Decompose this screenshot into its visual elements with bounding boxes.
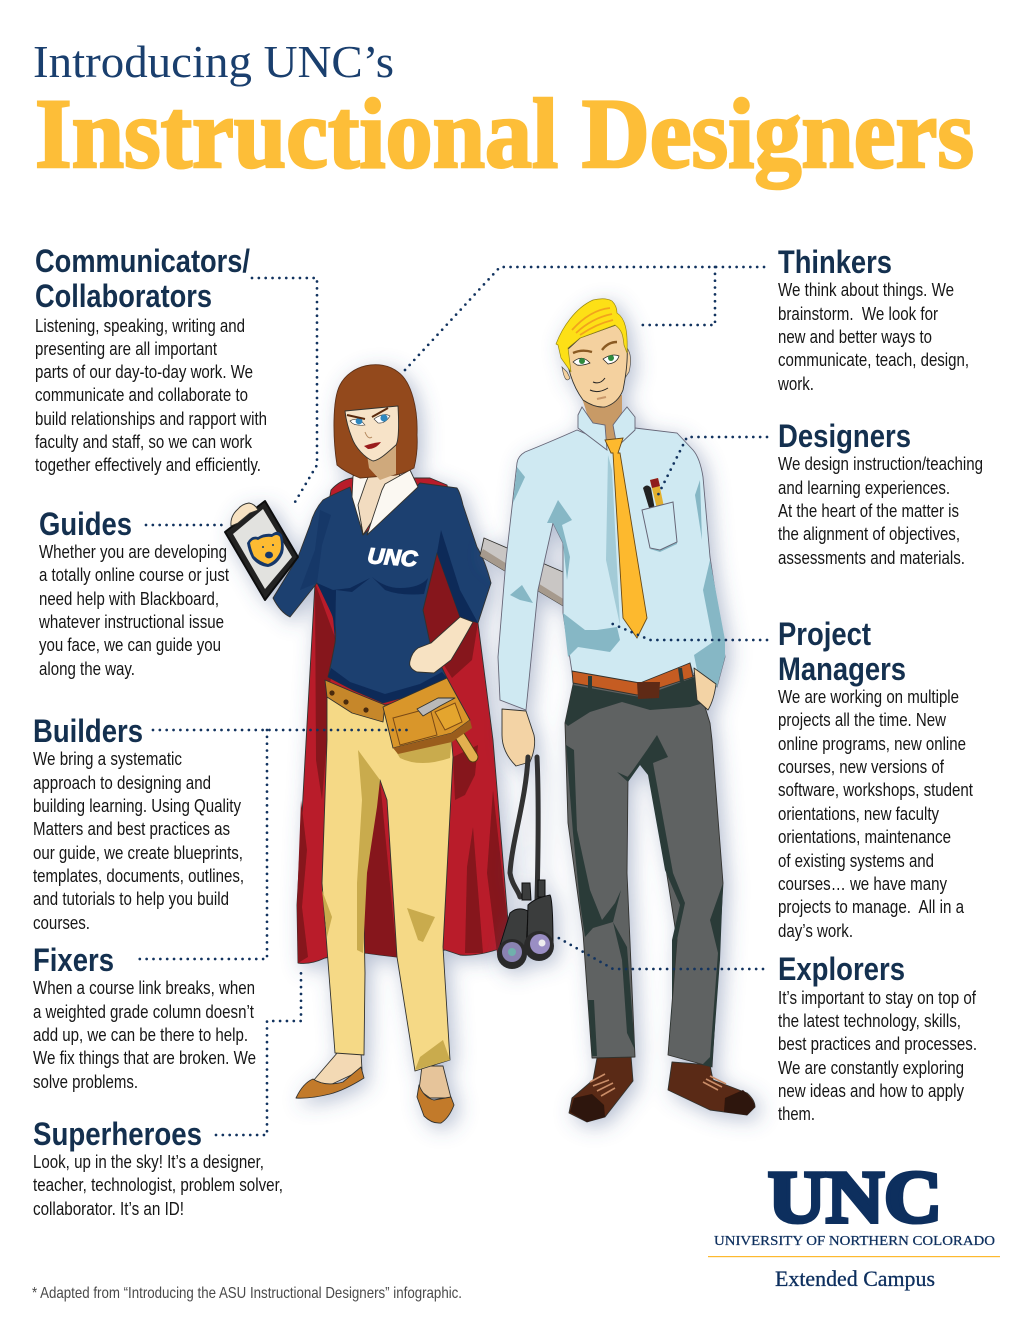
trouser shading — [565, 677, 723, 1067]
heading: Managers — [778, 651, 906, 687]
woman's eyes and mouth — [347, 408, 390, 449]
heading: Designers — [778, 418, 911, 454]
body text: software, workshops, student — [778, 780, 973, 800]
heading: Superheroes — [33, 1116, 202, 1152]
body text: We bring a systematic — [33, 749, 182, 769]
panel: builders — [33, 713, 244, 933]
body text: When a course link breaks, when — [33, 978, 255, 998]
body text: and learning experiences. — [778, 478, 950, 498]
body text — [38, 542, 229, 679]
body text: orientations, new faculty — [778, 804, 939, 824]
body text: and tutorials to help you build — [33, 889, 229, 909]
heading: Explorers — [778, 951, 905, 987]
body text: a weighted grade column doesn’t — [33, 1002, 254, 1022]
body text: them. — [778, 1104, 815, 1124]
body text: new ideas and how to apply — [778, 1081, 964, 1101]
man's hair — [556, 299, 627, 372]
body text: together effectively and efficiently. — [35, 455, 261, 475]
heading: Builders — [33, 713, 143, 749]
body text: Whether you are developing — [39, 542, 227, 562]
body text: work. — [777, 374, 814, 394]
body text: you face, we can guide you — [39, 635, 221, 655]
woman's neck — [366, 444, 396, 480]
body text: teacher, technologist, problem solver, — [33, 1175, 283, 1195]
body text: Look, up in the sky! It’s a designer, — [33, 1152, 264, 1172]
body text: solve problems. — [33, 1072, 138, 1092]
body text: It’s important to stay on top of — [778, 988, 977, 1008]
panel: communicators / collaborators — [35, 243, 267, 475]
body text: communicate, teach, design, — [778, 350, 969, 370]
body text: along the way. — [39, 659, 135, 679]
body text: approach to designing and — [33, 773, 211, 793]
cape — [297, 478, 510, 963]
panel: fixers — [33, 942, 256, 1092]
body text: templates, documents, outlines, — [33, 866, 244, 886]
hammer handle — [453, 725, 473, 757]
body text: a totally online course or just — [39, 565, 229, 585]
figure: man designer — [480, 299, 755, 1122]
body text: online programs, new online — [778, 734, 966, 754]
necktie — [605, 438, 647, 638]
body text: day’s work. — [778, 921, 853, 941]
body text: courses. — [33, 913, 90, 933]
panel: project managers — [778, 616, 973, 941]
panel: designers — [778, 418, 983, 568]
binoculars — [497, 880, 554, 969]
woman's neck and chest — [353, 448, 400, 535]
body text: We think about things. We — [778, 280, 954, 300]
heading: Project — [778, 616, 871, 652]
body text: parts of our day-to-day work. We — [35, 362, 253, 382]
body text: orientations, maintenance — [778, 827, 951, 847]
heading — [35, 243, 250, 314]
woman's hair — [334, 365, 417, 478]
man's left forearm and hand — [502, 709, 535, 766]
trouser belt — [572, 663, 693, 699]
title — [33, 36, 974, 189]
body text: courses… we have many — [778, 874, 947, 894]
woman's trousers — [322, 690, 453, 1071]
body text — [33, 978, 256, 1092]
footnote: * Adapted from “Introducing the ASU Instructional Designers” infographic. — [32, 1285, 462, 1302]
body text — [33, 749, 244, 933]
body text: presenting are all important — [35, 339, 217, 359]
body text: whatever instructional issue — [38, 612, 224, 632]
body text: courses, new versions of — [778, 757, 945, 777]
title line: Introducing UNC's: Introducing UNC’s — [33, 36, 394, 87]
body text: the latest technology, skills, — [778, 1011, 961, 1031]
body text: assessments and materials. — [778, 548, 965, 568]
body text: Listening, speaking, writing and — [35, 316, 245, 336]
body text: new and better ways to — [778, 327, 932, 347]
body text: We design instruction/teaching — [778, 454, 983, 474]
body text — [778, 687, 973, 941]
shirt collar — [578, 407, 635, 450]
body text: projects to manage. All in a — [778, 897, 965, 917]
tool belt — [325, 680, 385, 722]
man's shoes — [569, 1056, 755, 1122]
heading: Fixers — [33, 942, 114, 978]
body text: We are working on multiple — [778, 687, 959, 707]
bear logo — [247, 532, 284, 567]
blueprint roll — [480, 538, 619, 630]
heading: Thinkers — [778, 244, 892, 280]
woman's collar — [352, 468, 418, 535]
woman's sweater — [273, 483, 491, 703]
logo wordmark: UNC — [768, 1157, 942, 1239]
body text — [778, 988, 977, 1124]
binocular strap — [510, 757, 538, 900]
body text: collaborator. It’s an ID! — [33, 1199, 184, 1219]
university name: UNIVERSITY OF NORTHERN COLORADO — [714, 1233, 995, 1248]
heading — [778, 616, 906, 687]
tablet — [225, 501, 298, 600]
trouser shading — [322, 737, 452, 1070]
dotted leader lines — [136, 267, 767, 1135]
heading: Collaborators — [35, 278, 212, 314]
man's head — [562, 325, 631, 407]
figure: woman superhero designer — [225, 365, 510, 1123]
body text: Matters and best practices as — [33, 819, 230, 839]
shirt pocket with pens — [642, 478, 677, 550]
body text — [777, 280, 969, 394]
body text: build relationships and rapport with — [35, 409, 267, 429]
body text: We are constantly exploring — [778, 1058, 964, 1078]
body text: faculty and staff, so we can work — [35, 432, 253, 452]
panel: superheroes — [33, 1116, 283, 1219]
shirt shading — [510, 455, 725, 687]
woman's face — [345, 406, 399, 461]
man's shirt — [498, 428, 725, 710]
body text — [33, 1152, 283, 1219]
body text: add up, we can be there to help. — [33, 1025, 248, 1045]
body text: At the heart of the matter is — [778, 501, 959, 521]
body text: best practices and processes. — [778, 1034, 977, 1054]
body text — [35, 316, 267, 475]
heading: Guides — [39, 506, 132, 542]
man's right hand in pocket — [694, 668, 716, 710]
sweater shading — [300, 510, 478, 703]
woman's shoes — [296, 1052, 454, 1123]
panel: explorers — [778, 951, 977, 1124]
hand holding tablet — [231, 503, 258, 526]
body text: communicate and collaborate to — [35, 385, 248, 405]
panel: guides — [38, 506, 229, 679]
body text: brainstorm. We look for — [778, 304, 938, 324]
body text: building learning. Using Quality — [33, 796, 241, 816]
man's trousers — [565, 675, 723, 1067]
body text: our guide, we create blueprints, — [33, 843, 243, 863]
title line: Instructional Designers: Instructional Designers — [35, 78, 974, 189]
body text: need help with Blackboard, — [39, 589, 219, 609]
man's neck — [582, 395, 622, 440]
panel: thinkers — [777, 244, 969, 394]
UNC lettering on sweater: UNC — [367, 543, 419, 572]
body text: of existing systems and — [778, 851, 934, 871]
body text: We fix things that are broken. We — [33, 1048, 256, 1068]
hair highlight — [572, 308, 613, 335]
heading: Communicators/ — [35, 243, 250, 279]
body text: the alignment of objectives, — [778, 524, 960, 544]
body text — [778, 454, 983, 568]
woman's forearm and fist — [410, 617, 473, 673]
logo: UNC Extended Campus — [708, 1157, 1000, 1291]
tool pouch with hammer — [383, 678, 472, 754]
body text: projects all the time. New — [778, 710, 947, 730]
extended campus: Extended Campus — [775, 1266, 935, 1291]
